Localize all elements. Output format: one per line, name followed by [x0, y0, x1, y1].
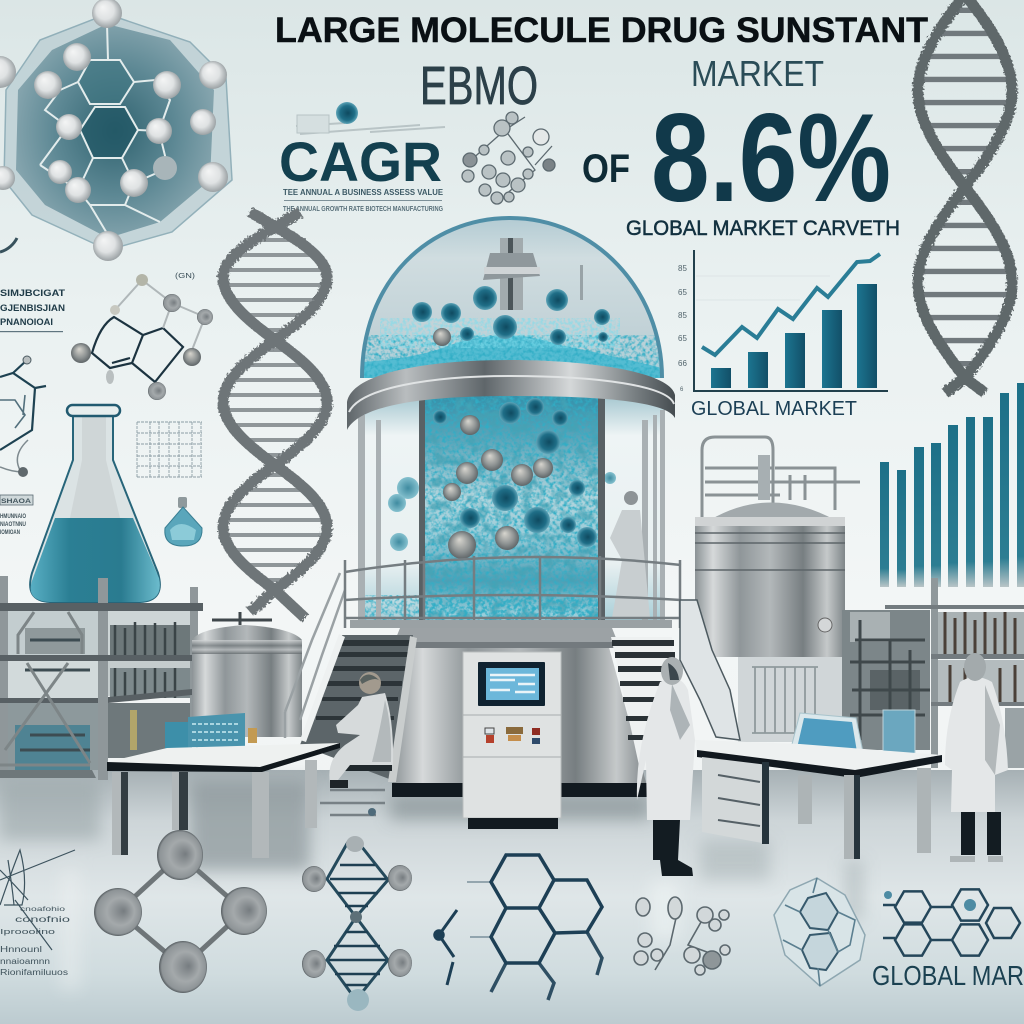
standing scientist: centre: [637, 657, 695, 876]
bioreactor: [345, 218, 681, 628]
steel ring: [347, 360, 675, 430]
right storage tank: [695, 437, 860, 657]
text: OF: OF: [582, 147, 630, 191]
CAGR caption text: TEE ANNUAL A BUSINESS ASSESS VALUE: [283, 188, 444, 197]
tablet devices: [790, 710, 915, 757]
sketch with notes, bottom left: Rionifamiluuos: [0, 968, 68, 977]
left work table: [107, 713, 340, 858]
CAGR caption text: [283, 188, 444, 213]
icon: ring molecule: [71, 274, 213, 400]
left text block: [0, 288, 66, 332]
DNA double helix: upper right: [918, 0, 1012, 393]
left text block: PNANOIOAI: [0, 317, 53, 327]
control buttons: [485, 727, 540, 744]
lab floor: [0, 770, 1024, 1024]
railing: [345, 556, 681, 628]
left staircase: [285, 573, 417, 782]
heading: EBMO: EBMO: [420, 56, 538, 116]
standing scientist: right: [945, 653, 1008, 862]
sketch with notes, bottom left: conofnio: [15, 915, 71, 924]
left lab shelving: [0, 576, 203, 780]
right staircase: [611, 637, 688, 770]
title: LARGE MOLECULE DRUG SUNSTANT: [275, 11, 928, 50]
sketch with notes, bottom left: Iproooiino: [0, 929, 55, 936]
left storage tank: [192, 612, 302, 737]
blue instrument: [165, 713, 257, 755]
trend line: [702, 254, 880, 355]
molecule: small DNA with spheres: [302, 836, 412, 1011]
control cabinet: [463, 652, 561, 829]
small label: (GN): [175, 273, 195, 280]
DNA double helix: centre: [223, 212, 327, 618]
chart bars: [711, 284, 877, 388]
heading: CAGR: CAGR: [279, 130, 442, 193]
CAGR caption text: THE ANNUAL GROWTH RATE BIOTECH MANUFACTURING: [283, 206, 443, 213]
icon: glass flask: [30, 405, 160, 602]
molecule: hexagon lattice: [435, 855, 602, 1000]
small text block: NIAOTNNU: [0, 522, 26, 528]
market bars, right: [880, 383, 1024, 587]
glass posts: [419, 395, 605, 622]
line and bar chart: [678, 250, 888, 393]
molecule: sketched cluster: [634, 897, 730, 975]
small text block: [0, 495, 33, 536]
reactor pedestal: [392, 628, 647, 797]
y axis labels: [678, 264, 687, 393]
icon: grid chart: [137, 422, 202, 477]
glass cylinder: [358, 395, 665, 622]
left text block: SIMJBCIGAT: [0, 288, 66, 298]
y axis labels: 65: [678, 334, 687, 343]
protective sheet: [680, 600, 740, 740]
molecule: steel spheres: [94, 830, 267, 993]
subheading: global market growth: GLOBAL MARKET CARVETH: [626, 217, 900, 240]
sketch with notes, bottom left: cnoafohio: [20, 907, 66, 913]
sketched molecule cluster: [462, 112, 555, 204]
statistic: 8.6%: 8.6%: [651, 89, 891, 228]
inner scientist: [610, 491, 650, 618]
icon: glass fullerene molecule: [0, 0, 232, 261]
small text block: HMUNNAIO: [0, 514, 26, 520]
sketch with notes, bottom left: Hnnounl: [0, 945, 42, 954]
y axis labels: 65: [678, 288, 687, 297]
right work table: [695, 710, 942, 859]
left text block: GJENBISJIAN: [0, 303, 65, 313]
heading: MARKET: MARKET: [691, 53, 824, 94]
sketch with notes, bottom left: [0, 850, 75, 977]
y axis labels: 85: [678, 264, 687, 273]
icon: pendant flask: [165, 497, 202, 546]
small text block: IOMIOAN: [0, 530, 20, 536]
small text block: SHAOA: [1, 499, 32, 505]
dome molecules: [412, 286, 610, 346]
chart label: global market: GLOBAL MARKET: [691, 398, 857, 420]
molecule: right hexagon chain: [883, 889, 1020, 956]
icon: partial hexagon molecule: [0, 356, 46, 477]
y axis labels: 85: [678, 311, 687, 320]
small molecule above CAGR: [296, 102, 445, 134]
sketch with notes, bottom left: nnaioamnn: [0, 957, 50, 966]
right background equipment: [738, 578, 1024, 768]
seated scientist: [320, 672, 393, 816]
y axis labels: 6: [680, 387, 684, 393]
mixer shaft: [483, 238, 583, 310]
glass dome: [362, 218, 662, 380]
icon: glass hexagon sphere: [774, 878, 865, 986]
y axis labels: 66: [678, 359, 687, 368]
